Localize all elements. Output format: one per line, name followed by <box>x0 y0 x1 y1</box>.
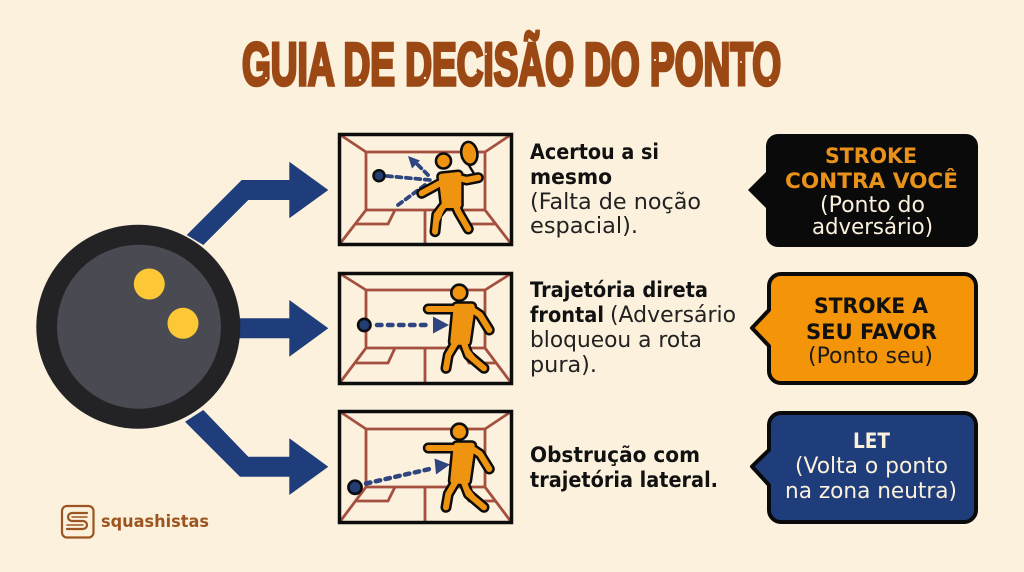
callout: stroke in your favour: STROKE A <box>814 294 929 318</box>
callout: stroke in your favour <box>752 274 976 383</box>
callout: let <box>752 413 976 522</box>
trajectory dashes <box>387 156 430 205</box>
icon: squash ball <box>36 225 240 429</box>
trajectory arrow <box>366 458 450 484</box>
callout: stroke in your favour: SEU FAVOR <box>806 320 937 344</box>
text: direct line <box>530 278 736 378</box>
text: direct line: (Adversário <box>610 303 736 328</box>
text: direct line: pura). <box>530 353 597 378</box>
callout: let: (Volta o ponto <box>795 454 948 479</box>
panel: court direct line <box>339 273 512 384</box>
text: hit self <box>530 140 701 239</box>
arrow: bottom branch <box>185 410 328 495</box>
panel: court lateral line <box>339 411 512 523</box>
text: direct line: bloqueou a rota <box>530 328 702 353</box>
callout: stroke against you <box>748 134 978 247</box>
callout: stroke against you: (Ponto do <box>820 193 925 218</box>
text: hit self: Acertou a si <box>530 140 659 164</box>
text: direct line: frontal <box>530 303 604 327</box>
text: hit self: mesmo <box>530 165 612 189</box>
text: hit self: (Falta de noção <box>530 190 701 215</box>
text: lateral line: Obstrução com <box>530 443 700 467</box>
callout: let: LET <box>853 429 891 453</box>
callout: stroke against you: STROKE <box>825 144 917 168</box>
ball <box>374 170 384 181</box>
text: hit self: espacial). <box>530 214 638 239</box>
logo: squashistas: squashistas <box>101 512 209 532</box>
callout: let: na zona neutra) <box>785 479 957 504</box>
player obstructing <box>428 424 489 507</box>
ball <box>348 481 362 494</box>
arrow: middle branch <box>230 300 328 357</box>
callout: stroke against you: CONTRA VOCÊ <box>785 168 958 193</box>
logo: squashistas <box>62 506 209 538</box>
arrow: top branch <box>187 162 328 245</box>
callout: stroke against you: adversário) <box>812 215 933 240</box>
panel: court hit self <box>339 134 512 245</box>
player blocking <box>428 285 489 368</box>
ball <box>358 319 370 331</box>
trajectory arrow <box>377 316 449 334</box>
text: direct line: Trajetória direta <box>530 278 708 302</box>
callout: stroke in your favour: (Ponto seu) <box>808 344 933 369</box>
player with racket <box>422 141 479 232</box>
text: lateral line: trajetória lateral. <box>530 468 718 492</box>
text: lateral line <box>530 443 718 492</box>
